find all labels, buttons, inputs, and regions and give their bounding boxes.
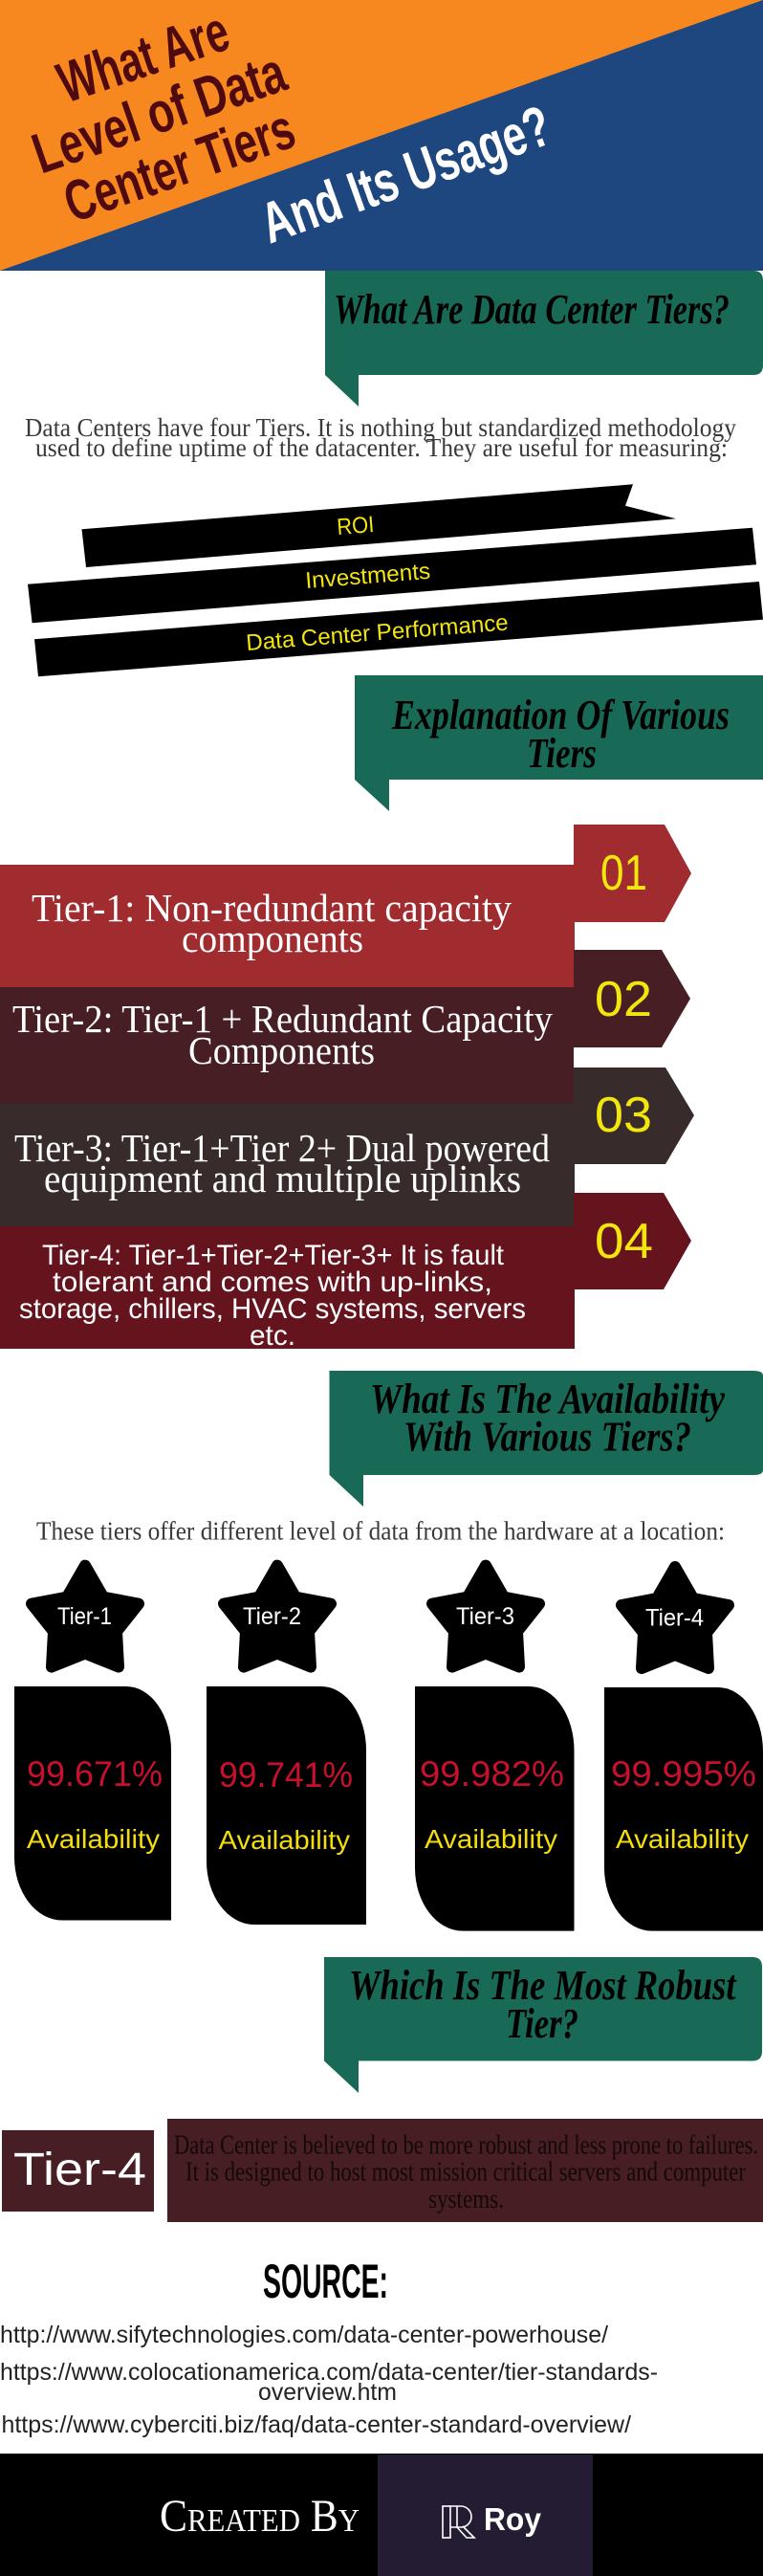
tier 3 availability column [415,1566,574,1931]
title: what are level of data center tiers: Center Tiers [55,97,303,234]
ribbons: measurement list [28,484,763,676]
card: 99.741% [207,1686,366,1925]
panel: most robust tier heading: Tier? [506,2000,578,2047]
text: created by: Created By [160,2491,360,2542]
icon: tier 1 star: Tier-1 [57,1603,112,1630]
text: tier 1 description: Tier-1: Non-redundant capacity [32,886,512,930]
text: tier 4 description: Tier-4: Tier-1+Tier-2+Tier-3+ It is fault [42,1240,505,1271]
panel: tier 4 row [0,1193,691,1352]
arrow: 02: 02 [595,972,652,1027]
tier 2 availability column [207,1566,366,1925]
panel: most robust tier heading [324,1957,762,2093]
title: what are level of data center tiers [24,0,303,234]
card: 99.982%: 99.982% [420,1754,564,1794]
icon: tier 2 star [224,1566,331,1667]
icon: tier 3 star [432,1566,539,1667]
tier 4 availability column [604,1567,763,1931]
icon: tier 3 star: Tier-3 [456,1603,514,1630]
text: tier 3 description [14,1126,550,1200]
panel: what are data center tiers heading [325,271,763,407]
panel: robust tier description: systems. [428,2184,504,2214]
icon: tier 4 star [621,1567,729,1668]
card: 99.995%: 99.995% [611,1754,756,1794]
text block: source links: https://www.colocationamerica.com/data-center/tier-standards- [0,2359,658,2386]
text: tier 2 description [12,997,553,1072]
text: tier 1 description: components [182,916,363,960]
card: 99.741%: Availability [218,1825,350,1855]
badge: tier 4: Tier-4 [13,2145,146,2195]
card: 99.982%: Availability [425,1824,557,1854]
ribbon: data center performance [34,582,763,676]
arrow: 01 [574,825,691,922]
icon: roy logo [443,2506,474,2538]
ribbon: ROI: ROI [336,512,375,540]
ribbon: investments: Investments [304,559,431,594]
title: what are level of data center tiers: Level of Data [24,39,294,186]
text: roy: Roy [484,2501,542,2537]
text: tier 2 description: Tier-2: Tier-1 + Redundant Capacity [12,997,553,1041]
text block: tiers introduction [25,413,736,462]
tier 1 availability column [14,1566,171,1921]
panel: explanation of various tiers heading: Tiers [527,730,597,777]
text block: tiers introduction: used to define uptime of the datacenter. They are useful for measuring: [35,433,728,462]
text: tier 3 description: equipment and multiple uplinks [44,1156,521,1200]
arrow: 01: 01 [600,846,647,901]
icon: tier 1 star [32,1566,139,1667]
arrow: 04 [574,1193,691,1289]
text block: source links: overview.htm [258,2379,397,2406]
panel: explanation of various tiers heading [355,675,763,811]
card: 99.671%: 99.671% [27,1754,163,1794]
icon: tier 4 star: Tier-4 [645,1605,704,1632]
panel: tier 3 row [0,1068,694,1226]
card: 99.741%: 99.741% [219,1755,353,1794]
subtitle: and its usage: And Its Usage? [252,93,559,255]
arrow: 04: 04 [595,1214,653,1269]
text: tier 4 description [19,1240,526,1352]
panel: availability heading: With Various Tiers? [403,1414,691,1460]
text block: source links [0,2322,658,2438]
ribbon: investments [28,528,756,623]
footer: credits bar [0,2454,763,2576]
panel: tier 2 row [0,950,690,1103]
text block: availability introduction: These tiers offer different level of data from the hardware at a location: [36,1517,725,1546]
text: tier 3 description: Tier-3: Tier-1+Tier 2+ Dual powered [14,1126,550,1170]
card: 99.671% [14,1686,171,1921]
icon: tier 2 star: Tier-2 [243,1603,301,1630]
text block: source links: http://www.sifytechnologies.com/data-center-powerhouse/ [0,2322,608,2348]
heading: source: SOURCE: [263,2255,388,2308]
header: diagonal title panel [0,0,763,271]
card: 99.995%: Availability [616,1824,749,1854]
text: tier 2 description: Components [188,1028,375,1072]
panel: availability heading [329,1371,763,1507]
card: 99.995% [604,1687,763,1931]
text: tier 4 description: etc. [250,1320,295,1352]
ribbon: ROI [82,484,676,567]
card: 99.982% [415,1686,574,1931]
text block: tiers introduction: Data Centers have four Tiers. It is nothing but standardized methodology [25,413,736,442]
panel: tier 1 row [0,825,691,987]
panel: robust tier description [167,2119,763,2222]
arrow: 03: 03 [595,1088,652,1143]
text block: source links: https://www.cyberciti.biz/faq/data-center-standard-overview/ [2,2411,631,2438]
text: tier 4 description: tolerant and comes with up-links, [53,1266,492,1298]
ribbon: data center performance: Data Center Performance [245,609,510,656]
badge: tier 4 [2,2130,154,2212]
arrow: 02 [574,950,690,1047]
card: 99.671%: Availability [27,1824,160,1854]
text: tier 1 description [32,886,512,960]
arrow: 03 [574,1068,694,1164]
text: tier 4 description: storage, chillers, HVAC systems, servers [19,1293,526,1325]
